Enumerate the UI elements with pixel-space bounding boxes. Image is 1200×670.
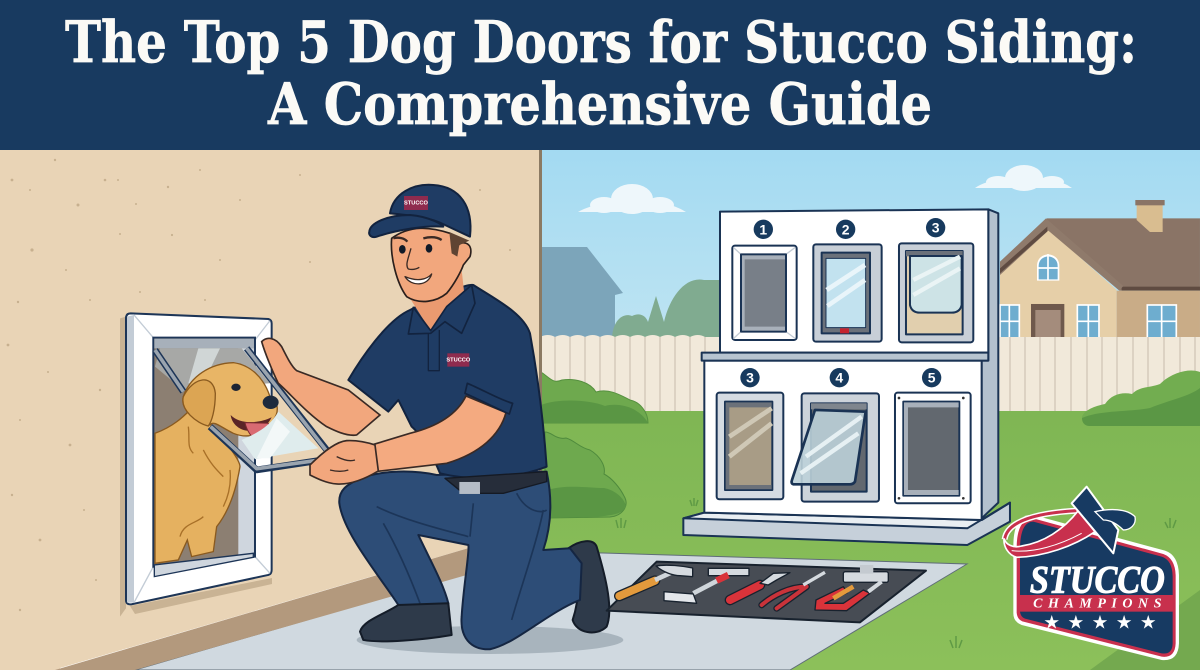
board side — [982, 209, 998, 518]
chimney — [1135, 200, 1165, 232]
distant house — [542, 247, 623, 340]
lawn shade — [1090, 590, 1200, 670]
cap logo — [404, 196, 429, 210]
badge numerals: 2 — [842, 221, 850, 237]
title banner — [0, 0, 1200, 150]
shirt logo — [446, 353, 471, 367]
fence — [540, 335, 1200, 411]
bush shade — [541, 401, 648, 423]
badge numerals: 1 — [759, 221, 767, 237]
hammer — [619, 565, 693, 596]
door frame — [126, 313, 272, 604]
roof eave — [1122, 287, 1200, 291]
windows — [1000, 305, 1176, 338]
front boot — [360, 603, 452, 641]
flap frame — [155, 348, 333, 470]
ribbon outer arc — [1005, 511, 1077, 539]
frame inner track — [154, 339, 254, 348]
dog ear — [183, 380, 215, 426]
door 3 bottom — [717, 393, 783, 499]
lower board — [704, 361, 982, 520]
arm and hand — [262, 338, 380, 435]
rake tool — [664, 568, 749, 603]
dog — [155, 363, 279, 563]
dog nose — [263, 396, 279, 409]
installer — [310, 185, 623, 654]
wall base strip — [55, 527, 540, 670]
gable wall — [1000, 228, 1117, 340]
shield red edge — [1017, 518, 1176, 657]
placket — [428, 330, 439, 371]
badge numerals: 5 — [928, 370, 936, 386]
finger lines — [330, 457, 355, 471]
distant trees — [612, 279, 722, 340]
logo subtitle: CHAMPIONS — [1033, 597, 1162, 612]
clamp — [815, 565, 888, 611]
cloud right — [975, 165, 1072, 191]
dog tongue — [245, 423, 269, 441]
brows — [393, 237, 442, 242]
badge numerals: 3 — [746, 370, 754, 386]
door 2 — [813, 244, 882, 342]
ribbon swoosh — [1004, 511, 1095, 557]
logo stars: ★★★★★ — [1043, 613, 1157, 634]
number badges — [740, 218, 945, 387]
pliers and screwdriver — [762, 572, 825, 608]
Stucco Champions logo — [1004, 487, 1179, 660]
trousers — [339, 472, 582, 649]
shirt logo: STUCCO — [446, 357, 471, 363]
pet door with dog — [120, 313, 380, 617]
belt buckle — [459, 482, 480, 494]
bush front shade — [548, 487, 626, 518]
shield outline — [1013, 515, 1179, 660]
trouser seams — [377, 493, 547, 620]
bush front — [545, 432, 626, 518]
ledge — [702, 353, 988, 361]
attic window — [1037, 254, 1059, 281]
bush behind fence left — [541, 372, 648, 423]
stucco wall — [0, 150, 542, 670]
upper board — [720, 209, 988, 353]
pliers red — [730, 573, 790, 600]
swoosh highlight — [1012, 533, 1082, 551]
base — [683, 503, 1010, 545]
frame side — [127, 315, 134, 603]
opening — [153, 338, 255, 567]
dog body — [155, 410, 240, 563]
collar — [408, 285, 475, 334]
head — [391, 228, 471, 301]
neck — [410, 270, 465, 330]
door 3 top — [899, 243, 973, 342]
door shadow on wall — [130, 578, 272, 614]
dog head — [183, 363, 277, 436]
sky — [540, 150, 1200, 420]
door display board — [683, 209, 1010, 545]
wall corner edge — [539, 150, 542, 552]
roof — [1047, 218, 1200, 291]
mat — [607, 562, 926, 622]
door 4 — [792, 393, 879, 502]
belt — [445, 472, 547, 493]
trowel — [1072, 487, 1118, 553]
cap brim — [369, 215, 443, 237]
flap glass upper — [155, 348, 270, 390]
badge numerals: 3 — [932, 220, 940, 236]
cloud left — [578, 184, 686, 214]
logo wordmark: STUCCO — [1030, 558, 1165, 602]
ribbon arc colour — [1005, 511, 1077, 539]
door — [1031, 304, 1064, 341]
cap logo: STUCCO — [404, 201, 429, 207]
dog eye — [231, 384, 241, 391]
sleeve cuff — [465, 383, 513, 414]
flap glass lower — [242, 412, 318, 459]
badge numerals: 4 — [835, 370, 843, 386]
badge numerals — [746, 220, 940, 386]
door 5 — [895, 393, 971, 503]
bush right — [1082, 370, 1200, 426]
red band — [1019, 595, 1174, 612]
nose — [407, 248, 419, 269]
forearm over shirt — [372, 396, 506, 472]
lower hand — [310, 441, 378, 484]
house — [1000, 200, 1200, 341]
polo shirt — [348, 285, 547, 478]
eyes — [399, 245, 406, 254]
grass lawn — [540, 410, 1200, 670]
dog fur lines — [180, 427, 230, 537]
grass tufts — [616, 498, 1176, 648]
title line 2: A Comprehensive Guide — [267, 71, 932, 138]
shield navy — [1020, 522, 1173, 654]
door 1 — [732, 246, 797, 340]
smile — [405, 274, 432, 284]
bush right shade — [1082, 388, 1200, 426]
gable trim — [1000, 218, 1123, 291]
door side shadow — [120, 317, 126, 617]
ground shadow — [357, 626, 623, 654]
frame mitres — [134, 315, 270, 603]
side wall — [1117, 291, 1200, 340]
pavement — [135, 552, 967, 670]
cap — [390, 185, 470, 237]
wall speckles — [7, 159, 511, 611]
dog mouth — [231, 415, 272, 431]
rear boot — [568, 541, 609, 632]
hair — [449, 232, 469, 257]
trowel handle — [1095, 510, 1135, 530]
tool mat — [607, 562, 926, 622]
